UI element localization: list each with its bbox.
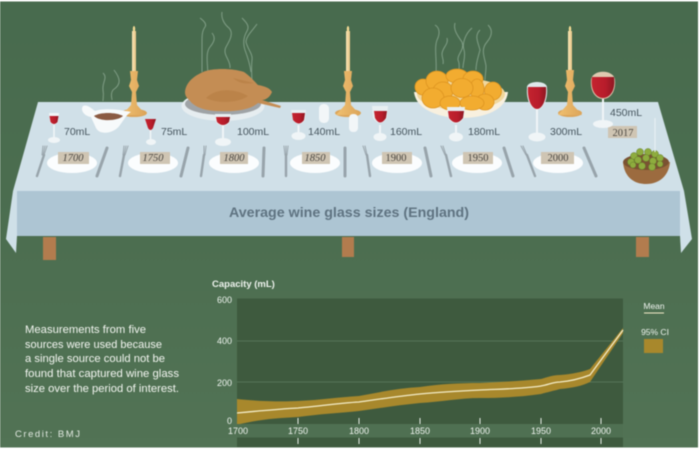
- glass capacity labels: 75mL: [161, 126, 187, 138]
- wine glass: 1750: [145, 119, 156, 145]
- wine glass: 1950: [447, 107, 465, 142]
- gravy boat: [82, 105, 131, 133]
- place card years: 1800: [224, 153, 245, 164]
- wine glass: 2017: [591, 72, 615, 128]
- place card years: 2000: [548, 153, 568, 164]
- glass capacity labels: 140mL: [308, 126, 340, 138]
- place card years: 1750: [142, 153, 164, 164]
- explanatory note: sources were used because: [25, 339, 162, 351]
- mean line: [237, 330, 623, 413]
- glass capacity labels: 180mL: [468, 126, 500, 138]
- place card years: 1900: [386, 153, 406, 164]
- legend: [641, 301, 669, 353]
- explanatory note: Measurements from five: [25, 324, 146, 336]
- confidence band: [237, 328, 623, 424]
- wine glass: 1700: [48, 113, 60, 143]
- x-axis labels: 2000: [591, 426, 611, 436]
- legend: Mean: [643, 301, 665, 311]
- plates: [47, 153, 583, 173]
- explanatory note: found that captured wine glass: [25, 368, 180, 380]
- y-axis labels: 400: [217, 336, 232, 346]
- x-axis labels: 1750: [288, 426, 308, 436]
- place card years: 1700: [62, 153, 84, 164]
- candle: right: [558, 26, 582, 117]
- line chart: capacity over time: [212, 279, 623, 447]
- place card years: 1950: [468, 153, 488, 164]
- table heading: Average wine glass sizes (England): [229, 205, 469, 220]
- legend: 95% CI: [641, 327, 669, 337]
- wine glass: 2000: [527, 82, 547, 142]
- faint glass beside sprouts: [654, 118, 656, 152]
- wine glass: 1850: [291, 110, 306, 140]
- y-axis labels: 200: [217, 378, 232, 388]
- x-axis labels: [228, 426, 611, 436]
- x-axis ticks: [298, 418, 601, 444]
- salt shakers: [319, 104, 358, 132]
- explanatory note: [25, 324, 180, 395]
- x-axis labels: 1950: [531, 426, 551, 436]
- turkey platter: [182, 69, 281, 121]
- cutlery: [37, 146, 596, 176]
- glass capacity labels: [64, 107, 642, 138]
- glass capacity labels: 100mL: [237, 126, 269, 138]
- explanatory note: size over the period of interest.: [25, 383, 179, 395]
- glass capacity labels: 300mL: [550, 126, 582, 138]
- place cards: [58, 126, 637, 164]
- y-axis labels: [217, 295, 232, 426]
- x-axis labels: 1900: [470, 426, 490, 436]
- table: [6, 102, 692, 260]
- candle: centre: [335, 26, 361, 117]
- place card years: 2017: [612, 128, 634, 139]
- line chart: capacity over time: Capacity (mL): [212, 279, 275, 290]
- glass capacity labels: 160mL: [390, 126, 422, 138]
- y-axis labels: 0: [227, 416, 232, 426]
- x-axis labels: 1700: [228, 426, 248, 436]
- wine glass: 1800: [215, 114, 231, 146]
- wine glass: 1900: [372, 106, 388, 141]
- explanatory note: a single source could not be: [25, 353, 165, 365]
- place card years: 1850: [304, 153, 326, 164]
- y-axis labels: 600: [217, 295, 232, 305]
- sprout bowl: [623, 148, 670, 184]
- place card years: [62, 128, 634, 164]
- potato bowl: [414, 69, 508, 118]
- glass capacity labels: 70mL: [64, 126, 90, 138]
- steam: [103, 12, 491, 101]
- glass capacity labels: 450mL: [610, 107, 642, 119]
- x-axis labels: 1800: [349, 426, 369, 436]
- candle: left: [121, 26, 147, 117]
- x-axis labels: 1850: [410, 426, 430, 436]
- credit: Credit: BMJ: [15, 429, 80, 440]
